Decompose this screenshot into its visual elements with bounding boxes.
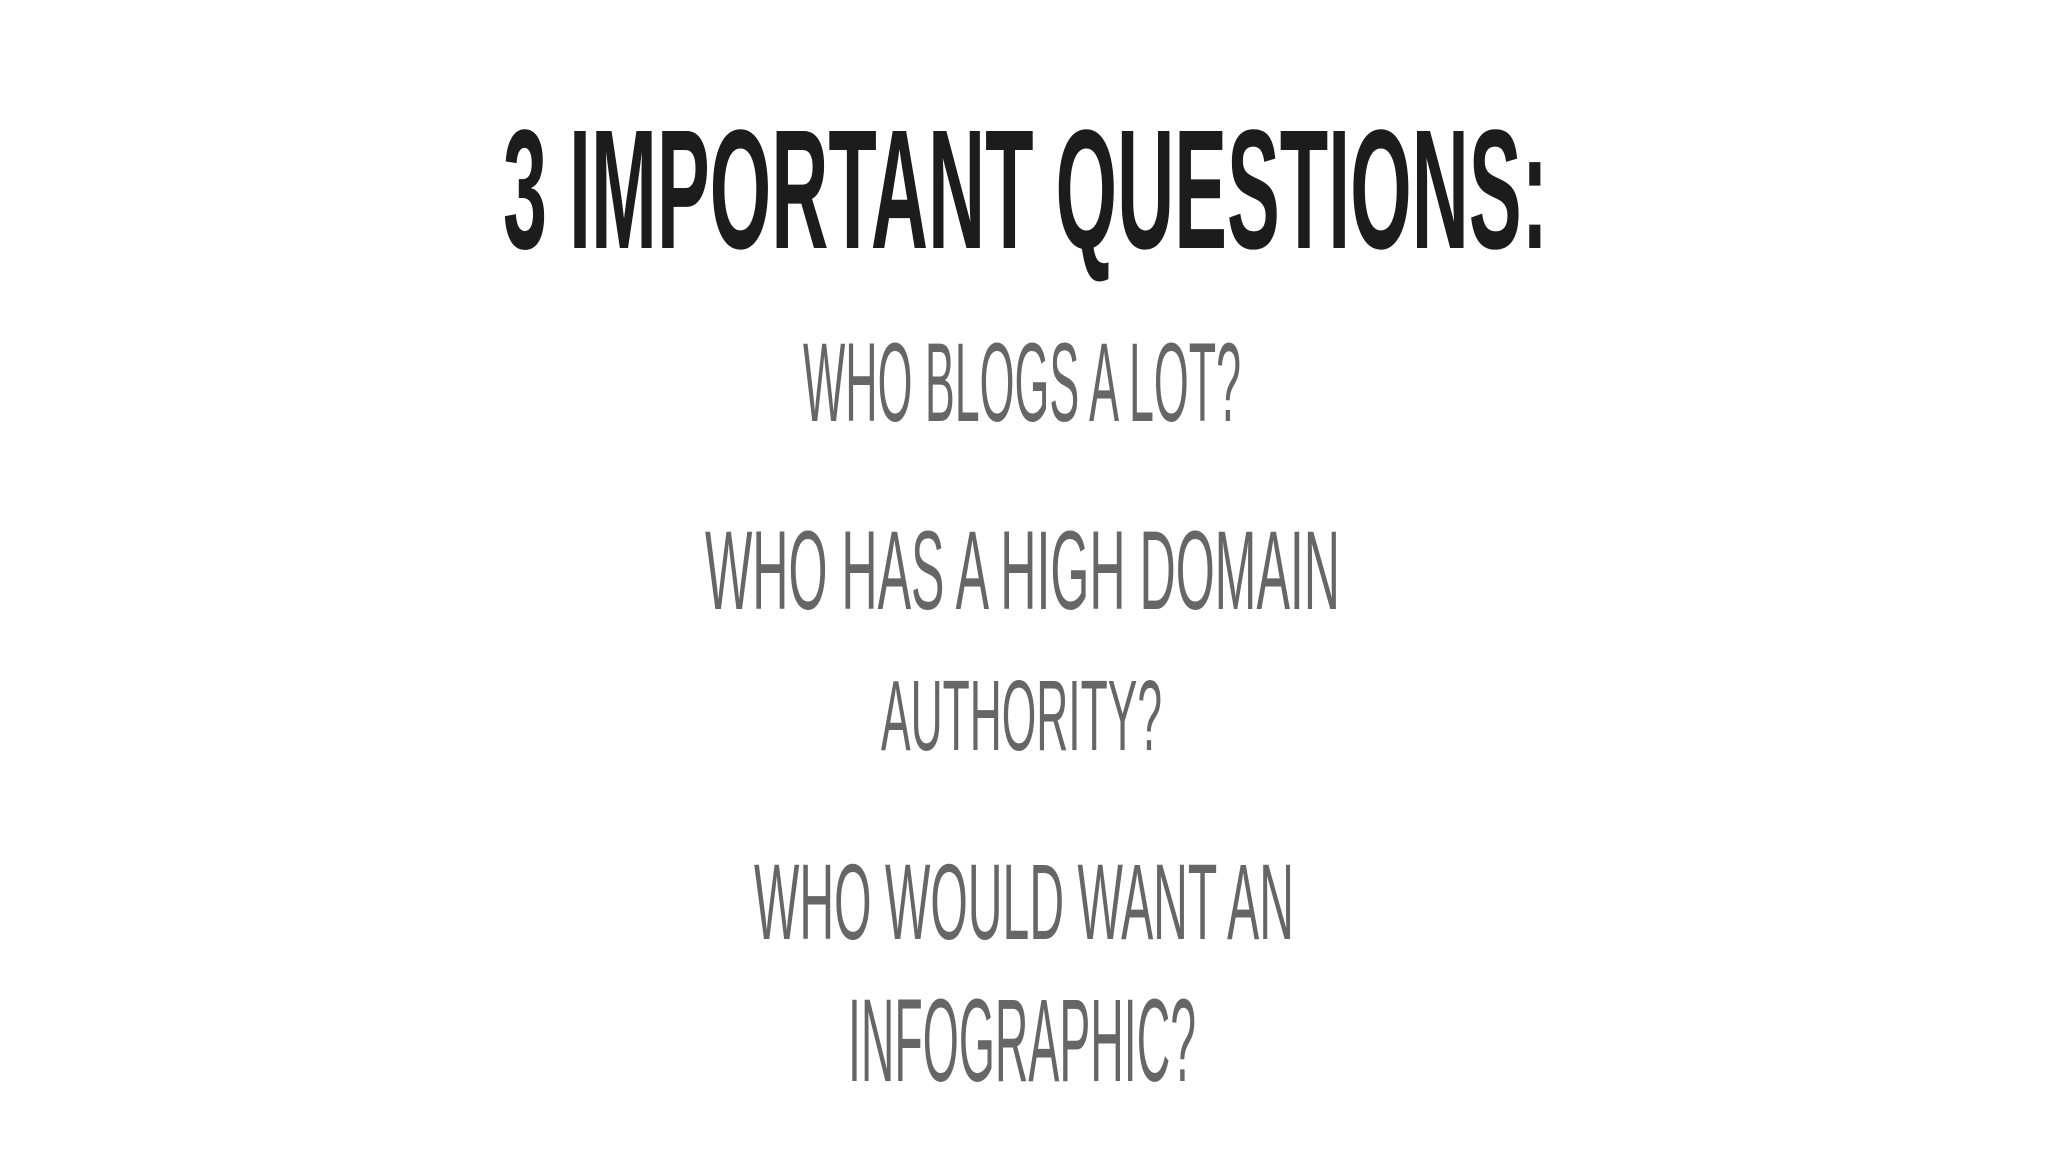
question 2 xyxy=(705,508,1340,772)
question 3 xyxy=(754,841,1294,1107)
text: WHO BLOGS A LOT? xyxy=(803,320,1241,445)
text: WHO WOULD WANT AN xyxy=(754,841,1294,962)
question 3: INFOGRAPHIC? xyxy=(848,975,1196,1107)
question 2: AUTHORITY? xyxy=(881,660,1162,772)
